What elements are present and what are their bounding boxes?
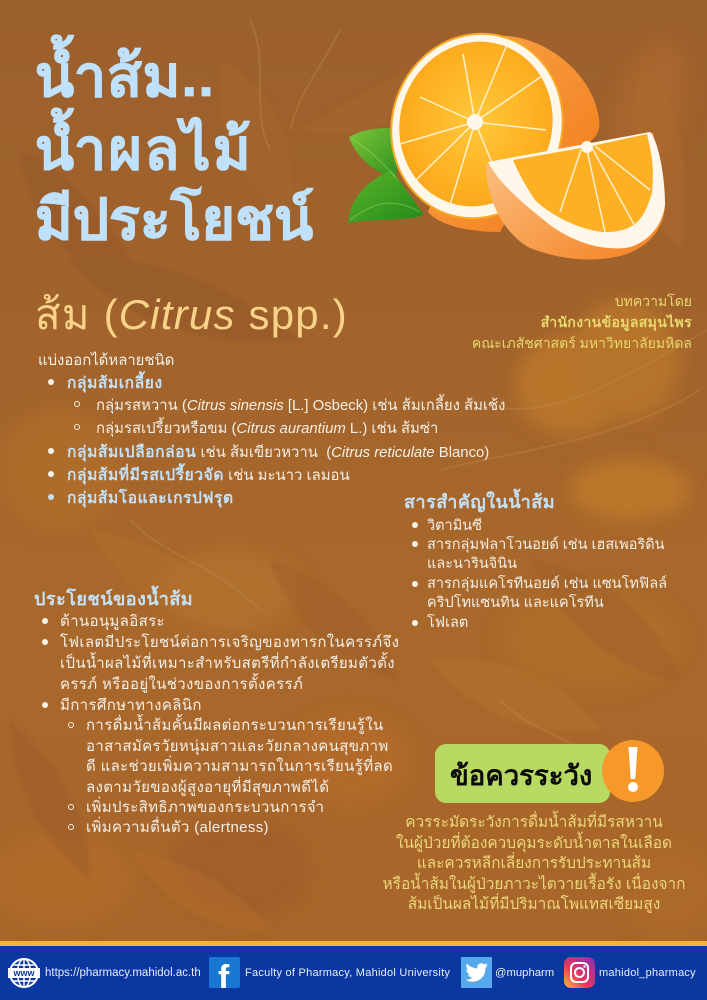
icon: www globe: [8, 958, 40, 988]
footer: [0, 941, 707, 1000]
text block: citrus types: กลุ่มส้มโอและเกรปฟรุต: [67, 490, 234, 507]
panel: key substances: และนารินจินิน: [427, 556, 517, 572]
panel: benefits: โฟเลตมีประโยชน์ต่อการเจริญของทารกในครรภ์จึง: [60, 634, 399, 651]
heading: benefits: ประโยชน์ของน้ำส้ม: [34, 589, 193, 609]
title: น้ำส้ม..: [35, 45, 215, 109]
credit: article by: สำนักงานข้อมูลสมุนไพร: [541, 314, 692, 330]
panel: key substances: สารกลุ่มแคโรทีนอยด์ เช่น แซนโทฟิลล์: [427, 576, 667, 592]
link: website: https://pharmacy.mahidol.ac.th: [45, 967, 201, 979]
text block: caution: และควรหลีกเลี่ยงการรับประทานส้ม: [417, 855, 651, 872]
text block: caution: หรือน้ำส้มในผู้ป่วยภาวะไตวายเรื้อรัง เนื่องจาก: [383, 876, 685, 893]
title: มีประโยชน์: [35, 188, 313, 252]
panel: benefits: เพิ่มความตื่นตัว (alertness): [86, 819, 269, 836]
text block: citrus types: กลุ่มส้มเปลือกล่อน เช่น ส้มเขียวหวาน (Citrus reticulate Blanco): [67, 444, 489, 461]
credit: article by: คณะเภสัชศาสตร์ มหาวิทยาลัยมหิดล: [472, 335, 692, 351]
heading: key substances: สารสำคัญในน้ำส้ม: [404, 492, 555, 512]
icon: orange with leaves: [348, 32, 665, 260]
panel: benefits: เป็นน้ำผลไม้ที่เหมาะสำหรับสตรีที่กำลังเตรียมตัวตั้ง: [60, 655, 395, 672]
icon: twitter: [461, 957, 492, 988]
panel: key substances: คริปโทแซนทิน และแคโรทีน: [427, 595, 604, 611]
icon: orange wedge: [486, 132, 665, 260]
panel: benefits: ลงตามวัยของผู้สูงอายุที่มีสุขภาพดีได้: [86, 779, 329, 796]
title: [35, 34, 314, 252]
text block: citrus types: กลุ่มส้มเกลี้ยง: [67, 375, 163, 392]
panel: benefits: เพิ่มประสิทธิภาพของกระบวนการจำ: [86, 799, 324, 816]
panel: benefits: ดี และช่วยเพิ่มความสามารถในการเรียนรู้ที่ลด: [86, 758, 393, 775]
icon: facebook: [209, 957, 240, 988]
icon: www globe: www: [12, 968, 35, 978]
text block: citrus types: แบ่งออกได้หลายชนิด: [38, 353, 174, 369]
icon: instagram: [564, 957, 595, 988]
callout: caution badge: ข้อควรระวัง: [450, 760, 592, 791]
text block: caution: ในผู้ป่วยที่ต้องควบคุมระดับน้ำตาลในเลือด: [396, 835, 672, 852]
text block: citrus types: [38, 352, 505, 508]
panel: key substances: วิตามินซี: [427, 518, 482, 534]
panel: key substances: [404, 488, 667, 631]
credit: article by: [472, 293, 692, 351]
panel: benefits: ต้านอนุมูลอิสระ: [60, 613, 165, 630]
panel: benefits: อาสาสมัครวัยหนุ่มสาวและวัยกลางคนสุขภาพ: [86, 738, 389, 755]
text block: caution: ควรระมัดระวังการดื่มน้ำส้มที่มีรสหวาน: [405, 814, 663, 831]
text block: caution: ส้มเป็นผลไม้ที่มีปริมาณโพแทสเซียมสูง: [408, 896, 660, 913]
subheading: citrus: ส้ม (Citrus spp.): [35, 291, 348, 338]
panel: key substances: สารกลุ่มฟลาโวนอยด์ เช่น เฮสเพอริดิน: [427, 537, 665, 553]
credit: article by: บทความโดย: [615, 293, 692, 309]
link: facebook page: Faculty of Pharmacy, Mahidol University: [245, 967, 450, 979]
icon: halved orange: [366, 10, 599, 242]
title: น้ำผลไม้: [35, 118, 253, 182]
panel: benefits: [34, 586, 399, 836]
link: twitter handle: @mupharm: [495, 967, 554, 979]
text block: citrus types: กลุ่มรสเปรี้ยวหรือขม (Citrus aurantium L.) เช่น ส้มซ่า: [96, 421, 438, 437]
text block: citrus types: กลุ่มรสหวาน (Citrus sinensis [L.] Osbeck) เช่น ส้มเกลี้ยง ส้มเช้ง: [96, 398, 505, 414]
callout: caution badge: [435, 740, 664, 803]
panel: benefits: ครรภ์ หรืออยู่ในช่วงของการตั้งครรภ์: [60, 676, 303, 693]
panel: benefits: มีการศึกษาทางคลินิก: [60, 697, 202, 714]
text block: caution: [383, 810, 685, 913]
panel: benefits: การดื่มน้ำส้มคั้นมีผลต่อกระบวนการเรียนรู้ใน: [86, 717, 383, 734]
icon: leaves: [348, 128, 424, 223]
text block: citrus types: กลุ่มส้มที่มีรสเปรี้ยวจัด เช่น มะนาว เลมอน: [67, 467, 350, 484]
link: instagram handle: mahidol_pharmacy: [599, 967, 696, 979]
panel: key substances: โฟเลต: [427, 615, 468, 631]
icon: exclamation: [602, 740, 664, 802]
